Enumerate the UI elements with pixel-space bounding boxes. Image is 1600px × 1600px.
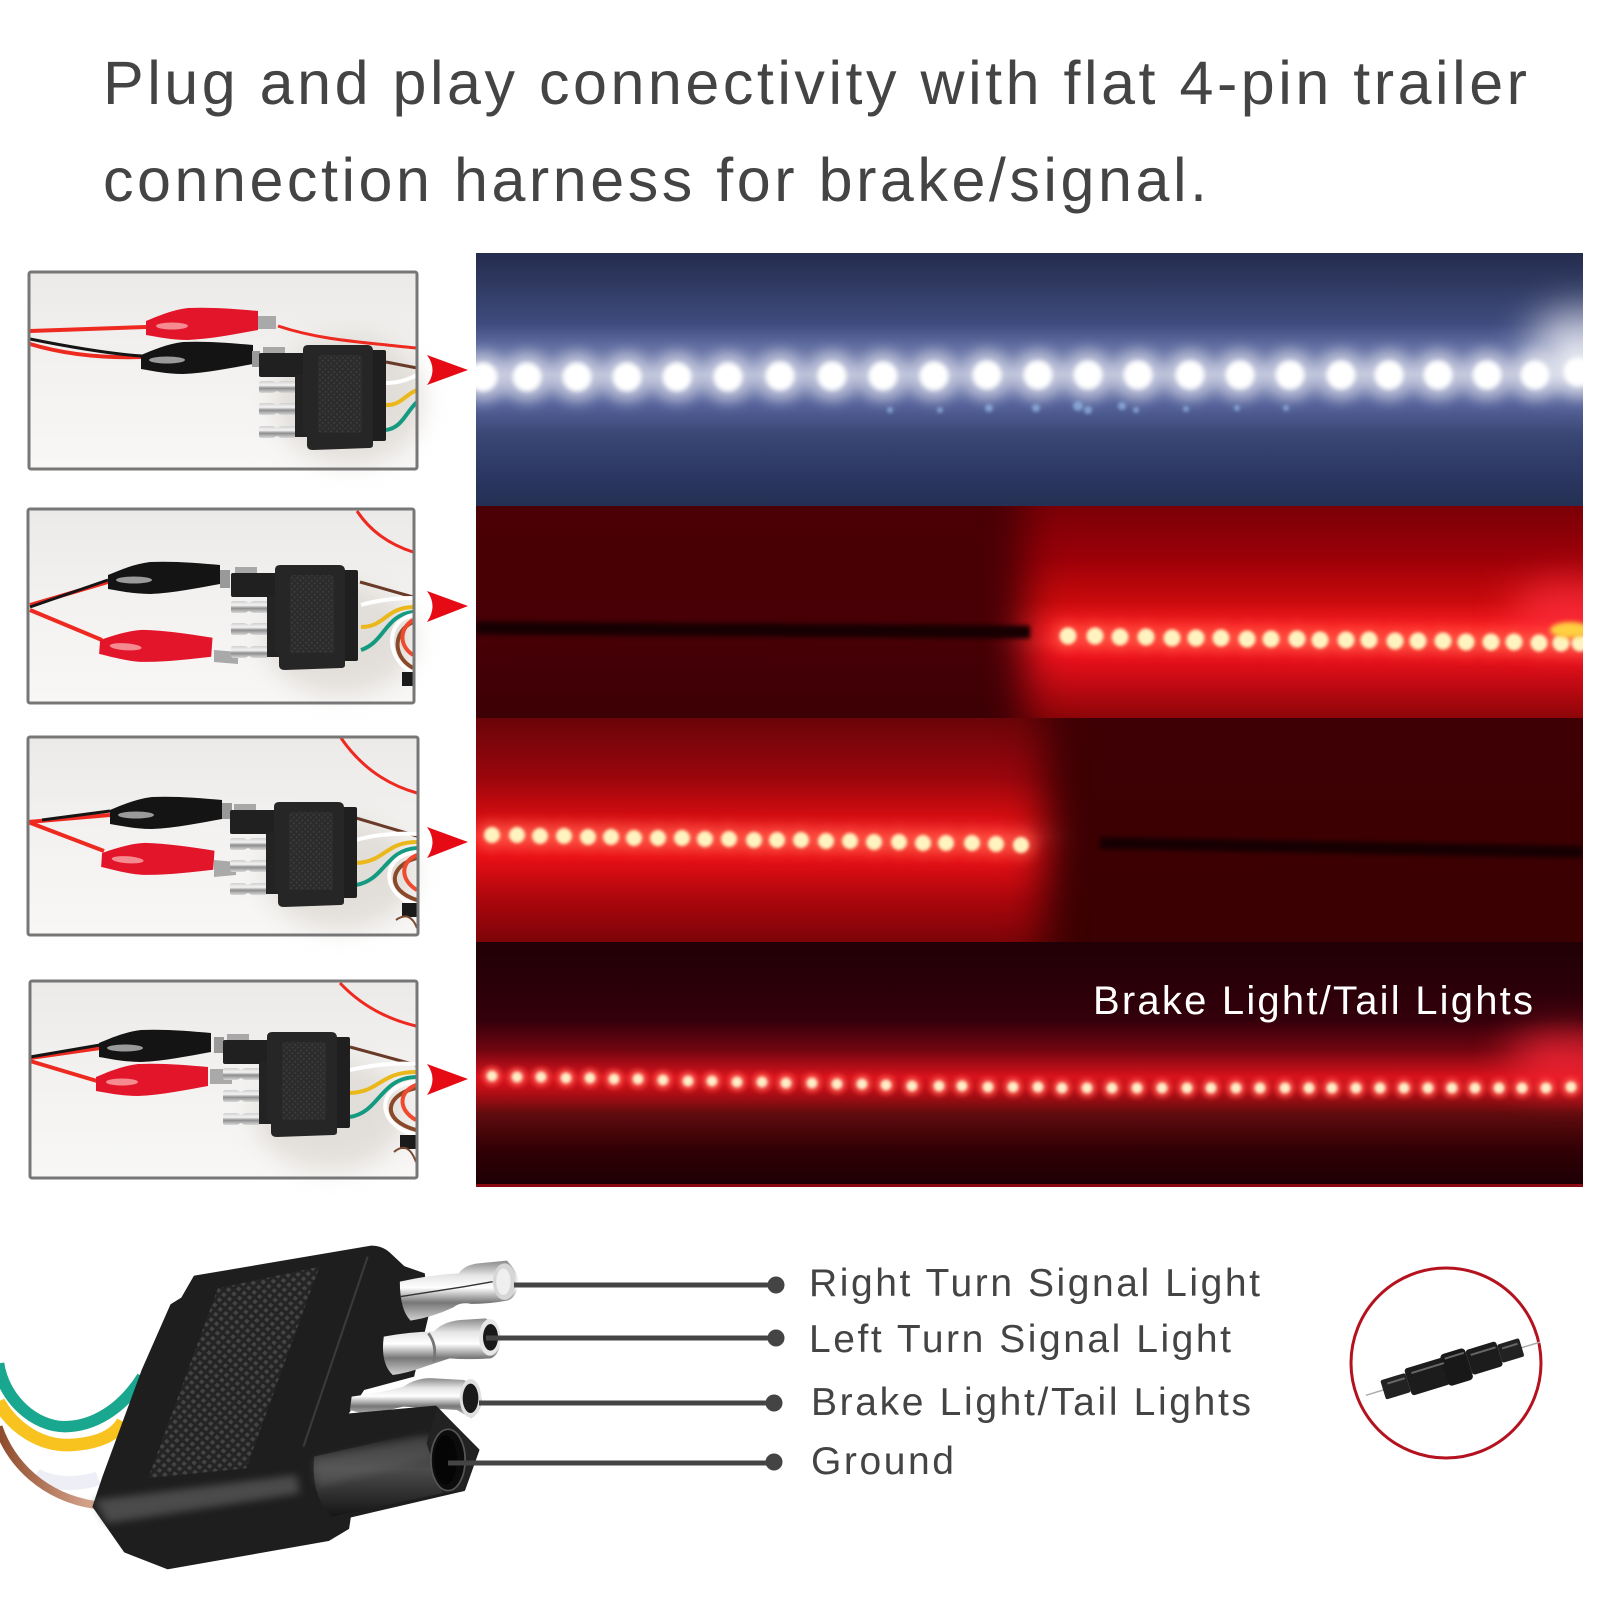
black clip bbox=[110, 797, 222, 829]
socket end bbox=[427, 1407, 478, 1493]
red clip bbox=[146, 308, 258, 340]
fuse holder bbox=[1361, 1326, 1545, 1411]
black clip bbox=[141, 342, 253, 374]
black clip bbox=[99, 1030, 211, 1062]
test leads bbox=[28, 738, 417, 851]
strip state: right turn signal lit bbox=[476, 506, 1600, 718]
strip state: brake and tail lights bbox=[476, 942, 1600, 1187]
panel: wiring photo 3 bbox=[28, 737, 418, 935]
colored wires bbox=[0, 1363, 143, 1505]
connector wires bbox=[356, 818, 417, 905]
connector bbox=[231, 565, 358, 670]
edge ridge bbox=[303, 1257, 368, 1447]
connector bbox=[223, 1032, 350, 1137]
pin labels bbox=[809, 1262, 1260, 1483]
panel: LED strip light states bbox=[476, 253, 1583, 1187]
pin plate bbox=[332, 1263, 428, 1420]
pins bbox=[400, 1261, 518, 1321]
connector bbox=[230, 802, 357, 907]
red clip bbox=[101, 840, 215, 880]
connector wires bbox=[350, 1047, 416, 1135]
panel: wiring photo 2 bbox=[28, 509, 415, 703]
pin labels: Right Turn Signal Light bbox=[809, 1262, 1260, 1305]
test leads bbox=[30, 983, 416, 1081]
black clip bbox=[108, 562, 220, 594]
test leads bbox=[30, 326, 416, 357]
red clip bbox=[96, 1064, 208, 1096]
connector wires bbox=[360, 582, 413, 672]
title: connection harness for brake/signal. bbox=[103, 146, 1207, 214]
connector body bbox=[94, 1247, 478, 1568]
title: Plug and play connectivity with flat 4-pin trailer bbox=[103, 49, 1527, 117]
lower highlight bbox=[95, 1475, 300, 1523]
strip state: left turn signal lit bbox=[476, 718, 1583, 942]
socket barrel bbox=[314, 1430, 457, 1517]
red clip bbox=[99, 627, 213, 667]
arrows to strip states bbox=[427, 355, 468, 1095]
pin label leader lines bbox=[448, 1277, 784, 1470]
textured grip bbox=[148, 1267, 320, 1478]
test leads bbox=[30, 511, 413, 640]
large connector photo bbox=[0, 1247, 518, 1568]
pin labels: Brake Light/Tail Lights bbox=[811, 1381, 1251, 1424]
title bbox=[103, 49, 1527, 214]
pin labels: Left Turn Signal Light bbox=[809, 1318, 1231, 1361]
connector wires bbox=[386, 362, 417, 430]
panel: wiring photo 4 bbox=[30, 981, 417, 1178]
inline fuse callout bbox=[1351, 1268, 1545, 1458]
pin labels: Ground bbox=[811, 1440, 954, 1483]
photo frames bbox=[28, 272, 418, 1178]
panel: wiring photo 1 bbox=[29, 272, 425, 469]
strip state: white running light bbox=[476, 253, 1600, 506]
strip caption: Brake Light/Tail Lights bbox=[1093, 979, 1533, 1023]
connector bbox=[259, 345, 386, 450]
